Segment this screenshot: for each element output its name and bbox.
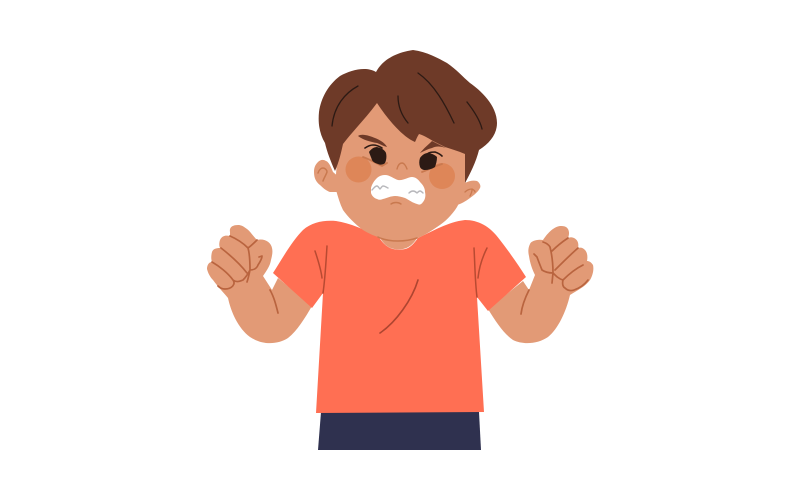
- right ear: [457, 181, 480, 205]
- mouth with clenched teeth: [371, 175, 425, 205]
- nose: [397, 163, 407, 169]
- pants: [318, 412, 481, 450]
- face: [336, 95, 470, 241]
- shirt: [273, 220, 526, 413]
- hair: [319, 50, 497, 183]
- neck: [376, 225, 422, 249]
- right eyebrow and eye: [419, 141, 446, 172]
- right cheek: [429, 163, 455, 189]
- left cheek: [346, 156, 372, 182]
- left ear: [314, 160, 340, 192]
- right arm and fist: [488, 226, 593, 343]
- left eyebrow and eye: [358, 135, 387, 166]
- neck line: [378, 237, 417, 241]
- left arm and fist: [207, 225, 312, 343]
